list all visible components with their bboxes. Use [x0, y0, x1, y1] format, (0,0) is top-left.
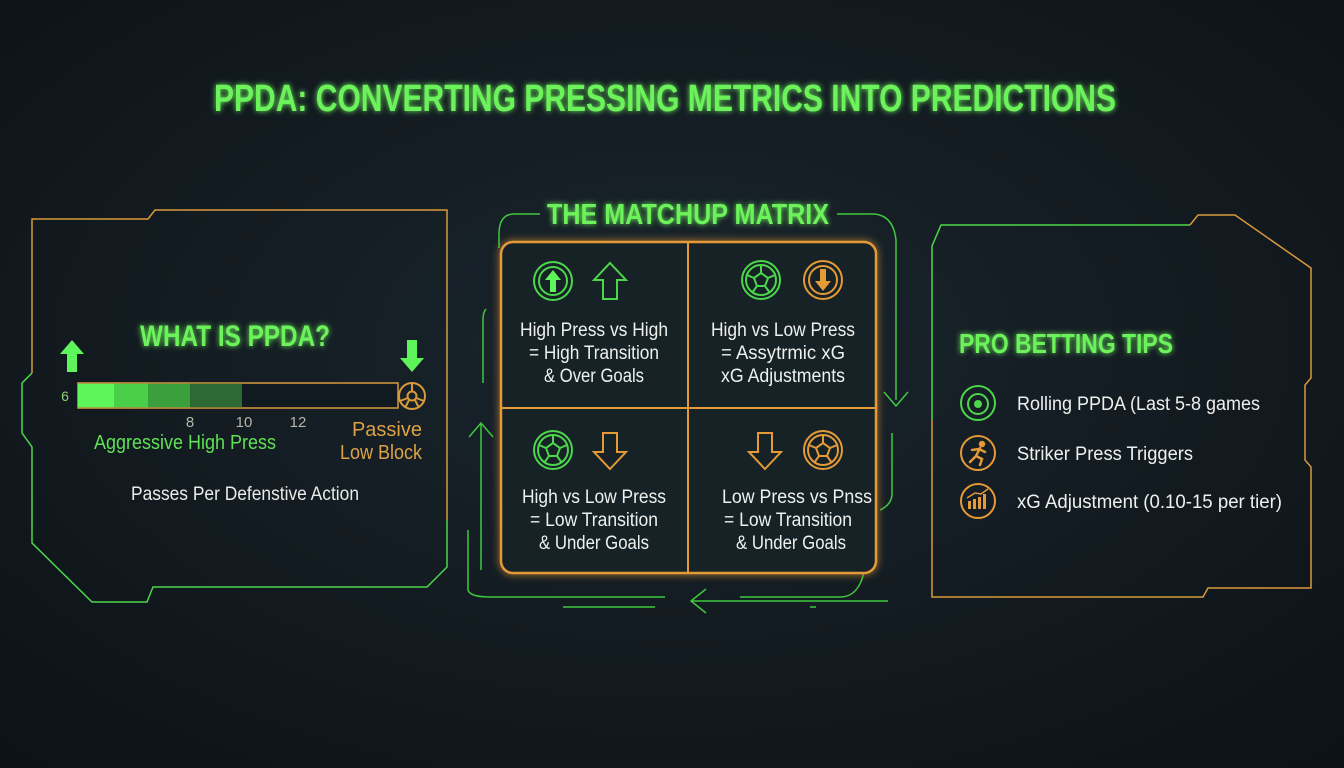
cell: high vs low: High vs Low Press — [711, 320, 855, 341]
cell: low vs low: = Low Transition — [724, 510, 852, 531]
icon: ball — [399, 383, 425, 409]
title: PPDA: CONVERTING PRESSING METRICS INTO PREDICTIONS — [214, 78, 1116, 120]
cell: low vs low — [722, 431, 872, 554]
cell: high vs low — [711, 261, 855, 387]
cell: high vs high — [520, 262, 668, 387]
cell: high vs low: = Assytrmic xG — [721, 343, 845, 364]
cycle arrows — [468, 214, 908, 613]
cell: high vs low: xG Adjustments — [721, 366, 845, 387]
cell: high vs high: = High Transition — [529, 343, 659, 364]
icon: down arrow — [400, 340, 424, 372]
heading: pro betting tips: PRO BETTING TIPS — [959, 328, 1173, 359]
scale bar: 6 — [61, 388, 69, 404]
panel: matchup matrix — [468, 199, 908, 613]
tip 1: Rolling PPDA (Last 5-8 games — [1017, 394, 1260, 415]
panel: what is ppda — [22, 210, 447, 602]
icon: up arrow — [60, 340, 84, 372]
label: aggressive high press: Aggressive High Press — [94, 432, 276, 454]
cell: low vs low: & Under Goals — [736, 533, 846, 554]
matrix grid — [501, 242, 876, 573]
scale bar: 10 — [236, 414, 252, 431]
heading: the matchup matrix: THE MATCHUP MATRIX — [547, 199, 830, 231]
cell: high vs high: & Over Goals — [544, 366, 644, 387]
cell: high vs low press — [522, 431, 666, 554]
tip 2 — [961, 436, 1193, 470]
cell: high vs low press: = Low Transition — [530, 510, 658, 531]
cell: high vs low press: High vs Low Press — [522, 487, 666, 508]
panel: what is ppda: Low Block — [340, 442, 423, 464]
cell: high vs low press: & Under Goals — [539, 533, 649, 554]
cell: low vs low: Low Press vs Pnss — [722, 487, 872, 508]
heading: what is ppda: WHAT IS PPDA? — [140, 320, 330, 353]
panel: pro betting tips — [932, 215, 1311, 597]
text: definition: Passes Per Defenstive Action — [131, 484, 359, 505]
tip 3 — [961, 484, 1282, 518]
scale bar — [61, 383, 398, 431]
tip 2: Striker Press Triggers — [1017, 444, 1193, 465]
tip 1 — [961, 386, 1260, 420]
scale bar: 12 — [290, 414, 306, 431]
label: passive low block: Passive — [352, 419, 422, 441]
scale bar: 8 — [186, 414, 194, 431]
tip 3: xG Adjustment (0.10-15 per tier) — [1017, 492, 1282, 513]
cell: high vs high: High Press vs High — [520, 320, 668, 341]
